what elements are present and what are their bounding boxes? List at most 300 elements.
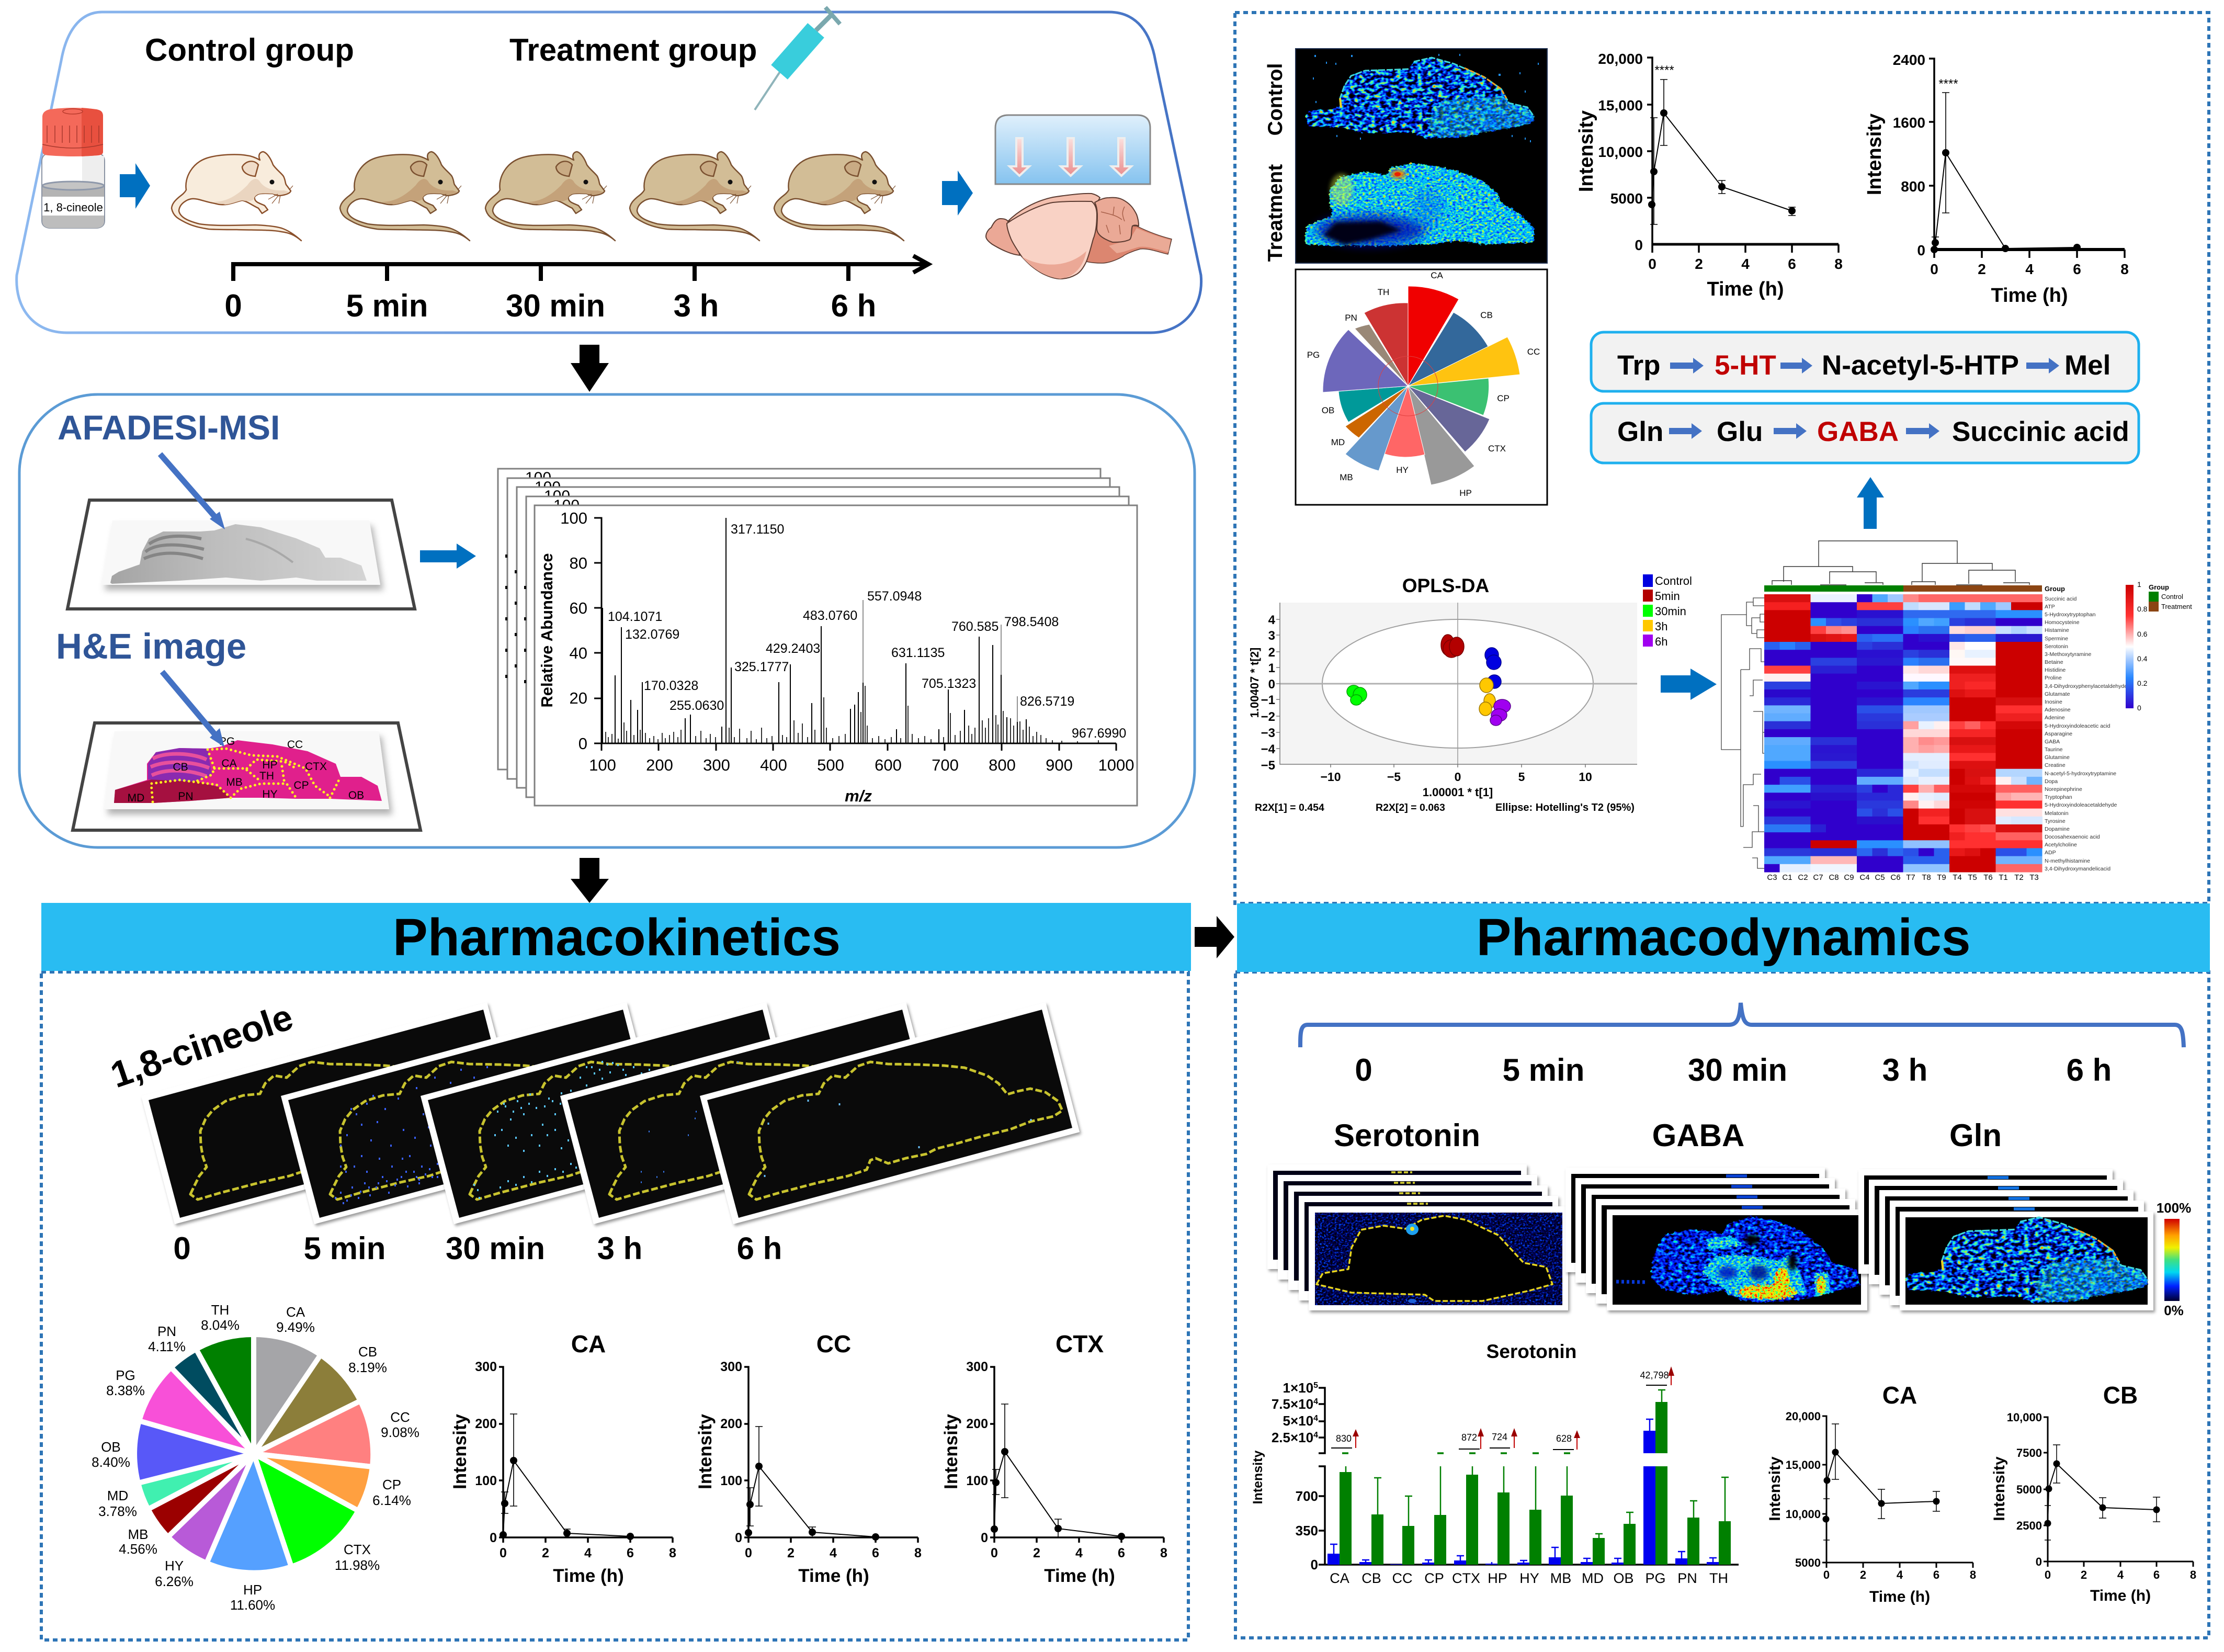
line chart: CA: CA: [1882, 1382, 1917, 1409]
heatmap row labels: Tyrosine: [2045, 818, 2066, 824]
line chart: CC: 2: [787, 1546, 795, 1560]
pathway box: glutamine pathway: Succinic acid: [1952, 416, 2129, 447]
pie chart labels: 6.26%: [155, 1574, 194, 1589]
time labels: [1355, 1053, 2112, 1088]
slide: H&E stained section: OB: [348, 789, 364, 801]
icon: syringe: [755, 7, 840, 110]
line chart: GABA-like metabolite over time: Intensity: [1864, 114, 1886, 195]
pie chart labels: CB: [358, 1344, 377, 1360]
mass spectrum peak labels: 705.1323: [922, 676, 976, 691]
heatmap column labels: C4: [1859, 873, 1870, 882]
heading: AFADESI-MSI: AFADESI-MSI: [58, 408, 280, 447]
mass spectrum x ticks: 100: [589, 756, 616, 774]
rose chart: regional change: OB: [1322, 405, 1334, 415]
line chart: CC: 0: [735, 1531, 742, 1545]
line chart: GABA-like metabolite over time: ****: [1938, 77, 1958, 91]
label: Treatment: Treatment: [1264, 164, 1287, 262]
rose chart: regional change: CB: [1480, 310, 1493, 320]
icon: control mouse: [172, 152, 301, 241]
heatmap row labels: Histamine: [2045, 627, 2069, 633]
line chart: GABA-like metabolite over time: 8: [2120, 261, 2129, 277]
pie chart labels: TH: [211, 1302, 229, 1318]
line chart: CTX: Time (h): [1044, 1566, 1115, 1586]
arrow: mice to brain: [942, 171, 973, 216]
header band: Pharmacokinetics: [41, 903, 1191, 971]
line chart: serotonin-like metabolite over time: Intensity: [1575, 110, 1597, 192]
rose chart: regional change: HY: [1396, 465, 1409, 475]
heatmap row labels: Melatonin: [2045, 810, 2069, 817]
legend: time groups: [1643, 574, 1692, 648]
stacked mass spectra: 100: [544, 488, 570, 505]
bar chart: Serotonin by region: CTX: [1452, 1570, 1480, 1586]
heatmap column labels: T6: [1983, 873, 1993, 882]
heatmap row labels: N-acetyl-5-hydroxytryptamine: [2045, 771, 2116, 777]
line chart: GABA-like metabolite over time: 2400: [1893, 52, 1925, 68]
heatmap colour bar: 0: [2137, 704, 2141, 712]
pie chart labels: 3.78%: [98, 1503, 137, 1519]
OPLS-DA statistics: R2X[2] = 0.063: [1376, 802, 1445, 813]
line chart: CB: CB: [2103, 1382, 2138, 1409]
fold-change callouts: 42,798: [1640, 1370, 1669, 1381]
image: 1,8-cineole at 5 min: [281, 1002, 661, 1224]
heatmap row labels: Taurine: [2045, 746, 2063, 753]
OPLS-DA statistics: R2X[1] = 0.454: [1255, 802, 1324, 813]
line chart: GABA-like metabolite over time: 0: [1917, 242, 1925, 258]
image: 1,8-cineole at 0 h: [141, 1002, 521, 1224]
mass spectrum peak labels: 760.585: [951, 619, 998, 634]
line chart: CC: 200: [720, 1417, 742, 1431]
heatmap group bar: [1764, 585, 2065, 593]
pie chart labels: 8.04%: [201, 1317, 240, 1333]
line chart: CTX: 300: [966, 1360, 988, 1374]
brace over time points: [1300, 1003, 2184, 1047]
mass spectrum peak labels: 132.0769: [625, 627, 679, 642]
OPLS-DA statistics: [1255, 802, 1635, 813]
mass spectrum x ticks: 800: [989, 756, 1016, 774]
slide: H&E stained section: PN: [178, 790, 194, 802]
heading: GABA: GABA: [1652, 1118, 1744, 1153]
heatmap column labels: T1: [1999, 873, 2008, 882]
heatmap column labels: T9: [1937, 873, 1946, 882]
scatter plot: OPLS-DA: −1: [1261, 693, 1275, 707]
mass spectrum x ticks: 600: [875, 756, 902, 774]
arrow: workflow to MSI: [571, 345, 609, 392]
timeline labels: [224, 288, 876, 323]
heatmap row labels: Norepinephrine: [2045, 786, 2082, 793]
line chart: CTX: 100: [966, 1474, 988, 1488]
line chart: CTX: [941, 1330, 1167, 1586]
line chart: CTX: 0: [991, 1546, 998, 1560]
heatmap group legend: [2149, 583, 2192, 612]
arrow: tissue to spectra: [420, 544, 476, 569]
scatter plot: OPLS-DA: 1.00001 * t[1]: [1423, 786, 1493, 799]
line chart: CC: 300: [720, 1360, 742, 1374]
time labels: [173, 1231, 782, 1266]
stacked mass spectra: [498, 469, 1137, 806]
line chart: CA: 5000: [1795, 1556, 1821, 1569]
panel: pharmacokinetics: [41, 903, 1191, 1640]
mass spectrum x ticks: 300: [703, 756, 730, 774]
slide: H&E stained section: CTX: [305, 761, 327, 773]
heatmap group legend: Treatment: [2161, 603, 2192, 610]
time labels: 5 min: [1503, 1053, 1584, 1088]
mass spectrum peak labels: 826.5719: [1020, 694, 1074, 709]
mass spectrum x ticks: [589, 756, 1134, 774]
bar chart: Serotonin by region: 7.5×10: [1272, 1396, 1313, 1412]
arrow: heatmap to pathways: [1857, 477, 1884, 529]
header band: Pharmacodynamics: Pharmacodynamics: [1477, 908, 1970, 967]
header band: Pharmacokinetics: Pharmacokinetics: [393, 908, 841, 967]
line chart: CB: [1991, 1382, 2196, 1604]
bar chart: Serotonin by region: Intensity: [1251, 1451, 1265, 1504]
legend: time groups: 3h: [1655, 620, 1667, 633]
line chart: CA: 6: [627, 1546, 634, 1560]
mass spectrum x ticks: 500: [817, 756, 844, 774]
heatmap row labels: 5-Hydroxyindoleacetic acid: [2045, 723, 2110, 729]
line chart: CC: 4: [830, 1546, 837, 1560]
line chart: CA: 0: [500, 1546, 507, 1560]
image stack: Serotonin: [1267, 1164, 1568, 1310]
column dendrogram: [1772, 541, 2029, 585]
line chart: CA: [1766, 1382, 1976, 1605]
heatmap colour bar: 0.2: [2137, 679, 2148, 687]
slide: H&E stained section: MB: [226, 776, 243, 788]
heatmap column labels: [1767, 873, 2039, 882]
mass spectrum x ticks: 1000: [1098, 756, 1134, 774]
mass spectrum peak labels: 631.1135: [891, 646, 945, 660]
line chart: CA: 100: [475, 1474, 497, 1488]
timeline labels: 6 h: [831, 288, 876, 323]
panel: AFADESI-MSI acquisition: [19, 394, 1195, 847]
mass spectrum peak labels: 483.0760: [803, 608, 857, 623]
mass spectrum y ticks: 40: [570, 644, 587, 662]
mass spectrum tall peaks: [603, 518, 1026, 743]
line chart: serotonin-like metabolite over time: 6: [1788, 256, 1796, 272]
rose chart: regional change: CC: [1527, 347, 1540, 357]
line chart: CA: Intensity: [1766, 1456, 1784, 1521]
bar chart: Serotonin by region: TH: [1709, 1570, 1728, 1586]
bar chart: Serotonin by region: MB: [1550, 1570, 1571, 1586]
heatmap row labels: 3,4-Dihydroxyphenylacetaldehyde: [2045, 683, 2127, 689]
line chart: CC: 6: [872, 1546, 879, 1560]
bar chart: Serotonin by region: CP: [1424, 1570, 1444, 1586]
timeline labels: 0: [224, 288, 242, 323]
mass spectrum y ticks: [560, 509, 587, 753]
line chart: GABA-like metabolite over time: 0: [1930, 261, 1938, 277]
heatmap row labels: N-methylhistamine: [2045, 858, 2090, 864]
arrow: vial to mice: [120, 163, 150, 209]
bar chart: Serotonin by region: PG: [1645, 1570, 1666, 1586]
heading: H&E image: H&E image: [56, 626, 246, 666]
slide: H&E stained section: HY: [262, 788, 278, 800]
slide: H&E stained section: [73, 723, 421, 830]
line chart: CB: 2500: [2016, 1519, 2042, 1532]
slide: H&E stained section: TH: [259, 770, 274, 782]
line chart: CTX: 4: [1075, 1546, 1083, 1560]
rose chart: regional change: HP: [1459, 488, 1472, 498]
image: 1,8-cineole at 30 min: [421, 1002, 800, 1224]
bar chart: Serotonin by region: 2.5×10: [1272, 1430, 1313, 1445]
rose chart: regional change: CA: [1431, 270, 1443, 280]
heatmap row labels: Succinic acid: [2045, 596, 2077, 602]
pathway box: glutamine pathway: GABA: [1817, 416, 1899, 447]
pie chart labels: MB: [128, 1526, 149, 1542]
line chart: serotonin-like metabolite over time: 8: [1834, 256, 1843, 272]
heatmap row labels: Glutamate: [2045, 691, 2070, 697]
bar chart: Serotonin by region: Serotonin: [1487, 1341, 1576, 1362]
scatter plot: OPLS-DA: 0: [1268, 677, 1275, 692]
pie chart: regional distribution: [134, 1334, 373, 1573]
pie chart labels: PN: [157, 1323, 176, 1339]
heatmap column labels: C1: [1782, 873, 1792, 882]
scatter plot: OPLS-DA: 10: [1579, 770, 1592, 784]
heatmap row labels: Spermine: [2045, 636, 2068, 642]
heatmap row labels: Adenosine: [2045, 707, 2071, 713]
heatmap column labels: T7: [1906, 873, 1915, 882]
OPLS-DA statistics: Ellipse: Hotelling's T2 (95%): [1495, 802, 1635, 813]
colour scale: 100%: [2157, 1200, 2191, 1216]
pie chart labels: 11.60%: [230, 1597, 275, 1613]
scatter plot: OPLS-DA: OPLS-DA: [1402, 575, 1489, 596]
line chart: CA: 8: [1970, 1568, 1976, 1581]
line chart: CC: Intensity: [695, 1414, 716, 1489]
heatmap row labels: Acetylcholine: [2045, 842, 2077, 848]
pie chart labels: 11.98%: [335, 1557, 380, 1573]
line chart: CC: 8: [914, 1546, 922, 1560]
legend: time groups: 6h: [1655, 635, 1667, 648]
panel: pharmacodynamics results: [1235, 13, 2209, 903]
pathway box: tryptophan pathway: Trp: [1617, 350, 1660, 381]
line chart: CA: 0: [490, 1531, 497, 1545]
bar chart: Serotonin by region: 0: [1311, 1557, 1318, 1572]
line chart: CB: 4: [2117, 1568, 2124, 1581]
scatter plot: OPLS-DA: −4: [1261, 742, 1276, 756]
line chart: CC: [695, 1330, 922, 1586]
rose chart: regional change: [1296, 269, 1547, 505]
time labels: 6 h: [737, 1231, 782, 1266]
MSI image: control vs treatment: [1296, 49, 1547, 263]
pie chart labels: CP: [382, 1477, 401, 1492]
mass spectrum peak labels: 798.5408: [1004, 615, 1059, 629]
line chart: CC: 0: [745, 1546, 752, 1560]
scatter plot: OPLS-DA: 4: [1268, 613, 1276, 627]
time labels: 3 h: [597, 1231, 642, 1266]
heatmap colour bar: 1: [2137, 580, 2141, 589]
heading: treatment group: Treatment group: [509, 32, 757, 67]
heading: Gln: Gln: [1949, 1118, 2002, 1153]
bar chart: Serotonin by region: 700: [1296, 1488, 1318, 1504]
scatter plot: OPLS-DA: 1: [1268, 661, 1275, 675]
icon: freezing box: [995, 115, 1150, 184]
scatter plot: OPLS-DA: −5: [1261, 759, 1275, 773]
icon: 1,8-cineole vial: 1, 8-cineole: [43, 201, 103, 214]
time labels: 5 min: [304, 1231, 385, 1266]
line chart: serotonin-like metabolite over time: 2: [1695, 256, 1703, 272]
arrow: sprayer to tissue: [160, 454, 225, 529]
bar chart: Serotonin by region: HP: [1488, 1570, 1507, 1586]
heatmap row labels: [2045, 596, 2127, 872]
arrow: sprayer to stained tissue: [162, 672, 224, 747]
line chart: serotonin-like metabolite over time: 15,000: [1598, 97, 1643, 114]
scatter plot: OPLS-DA: −2: [1261, 710, 1275, 724]
heatmap column labels: C8: [1829, 873, 1839, 882]
mass spectrum y ticks: 0: [578, 734, 587, 753]
line chart: GABA-like metabolite over time: 4: [2025, 261, 2034, 277]
line chart: CA: 300: [475, 1360, 497, 1374]
heatmap: [1764, 594, 2043, 873]
line chart: CB: 0: [2045, 1568, 2051, 1581]
line chart: CA: Intensity: [450, 1414, 470, 1489]
line chart: serotonin-like metabolite over time: [1575, 51, 1843, 300]
scatter plot: OPLS-DA: [1248, 575, 1637, 799]
line chart: GABA-like metabolite over time: 6: [2073, 261, 2081, 277]
line chart: serotonin-like metabolite over time: ****: [1654, 63, 1674, 77]
timeline labels: 3 h: [674, 288, 719, 323]
bar chart: Serotonin by region: 5: [1313, 1381, 1318, 1390]
pie chart labels: 8.38%: [106, 1383, 145, 1398]
pie chart labels: HP: [243, 1582, 262, 1598]
mass spectrum x label: m/z: [845, 787, 872, 805]
line chart: CC: Time (h): [798, 1566, 869, 1586]
arrow: pharmacokinetics to pharmacodynamics: [1195, 916, 1234, 958]
pathway box: tryptophan pathway: Mel: [2064, 350, 2110, 381]
legend: time groups: 5min: [1655, 590, 1680, 603]
time labels: 0: [1355, 1053, 1372, 1088]
icon: treated mouse 3 h: [630, 152, 759, 241]
fold-change callouts: 872: [1461, 1432, 1477, 1443]
legend: time groups: Control: [1655, 574, 1692, 587]
pie chart labels: 4.56%: [119, 1541, 157, 1557]
fold-change callouts: [1331, 1366, 1674, 1450]
scatter plot: OPLS-DA: −3: [1261, 726, 1275, 740]
stacked mass spectra: 100: [525, 469, 551, 486]
slide: H&E stained section: CB: [173, 761, 188, 773]
line chart: serotonin-like metabolite over time: 0: [1648, 256, 1656, 272]
image stack: GABA: [1565, 1168, 1867, 1310]
line chart: CA: 6: [1933, 1568, 1939, 1581]
fold-change callouts: 724: [1492, 1432, 1507, 1442]
bar chart: Serotonin by region: CB: [1361, 1570, 1381, 1586]
pie chart labels: CTX: [344, 1542, 371, 1557]
line chart: CA: Time (h): [553, 1566, 624, 1586]
line chart: CA: 2: [1860, 1568, 1866, 1581]
line chart: CTX: 8: [1160, 1546, 1167, 1560]
line chart: CTX: 0: [981, 1531, 988, 1545]
bar chart: Serotonin by region: 1×10: [1283, 1380, 1313, 1396]
scatter plot: OPLS-DA: 1.00407 * t[2]: [1248, 648, 1261, 718]
heatmap row labels: Glutamine: [2045, 754, 2070, 761]
mass spectrum peak labels: 317.1150: [731, 522, 784, 537]
pie chart labels: [92, 1302, 419, 1613]
rose chart: regional change: CP: [1497, 393, 1510, 403]
scatter plot: OPLS-DA: −5: [1387, 770, 1401, 784]
scatter plot: OPLS-DA: 5: [1518, 770, 1525, 784]
mass spectrum peak labels: 325.1777: [734, 660, 789, 674]
heatmap column labels: C3: [1767, 873, 1777, 882]
mass spectrum x ticks: 900: [1046, 756, 1073, 774]
heatmap row labels: 3-Methoxytyramine: [2045, 651, 2091, 658]
mass spectrum peak labels: 170.0328: [644, 678, 698, 693]
stacked mass spectra: 100: [553, 497, 580, 514]
line chart: CA: [450, 1330, 676, 1586]
pathway box: tryptophan pathway: [1591, 332, 2139, 391]
mass spectrum axes: [594, 518, 1116, 751]
icon: treated mouse 30 min: [485, 152, 615, 241]
pie chart labels: 9.49%: [276, 1319, 315, 1335]
heatmap row labels: Inosine: [2045, 699, 2062, 705]
label: 1,8-cineole: 1,8-cineole: [106, 996, 298, 1095]
bar chart: Serotonin by region: CC: [1392, 1570, 1412, 1586]
bar chart: Serotonin by region: OB: [1613, 1570, 1634, 1586]
bar chart: Serotonin by region: CA: [1330, 1570, 1349, 1586]
rose chart: regional change: MD: [1331, 437, 1345, 447]
heatmap row labels: Dopamine: [2045, 826, 2070, 832]
heatmap colour bar: 0.8: [2137, 605, 2148, 613]
heatmap row labels: Betaine: [2045, 659, 2063, 665]
line chart: CC: 100: [720, 1474, 742, 1488]
line chart: CA: 4: [1897, 1568, 1903, 1581]
heatmap row labels: Homocysteine: [2045, 619, 2080, 626]
slide: H&E stained section: MD: [128, 792, 144, 804]
mass spectrum peak labels: [608, 522, 1126, 741]
mass spectrum x ticks: 400: [760, 756, 787, 774]
pathway box: glutamine pathway: [1591, 403, 2139, 463]
timeline labels: 5 min: [346, 288, 428, 323]
line chart: CA: 4: [584, 1546, 592, 1560]
mass spectrum y label: Relative Abundance: [538, 553, 556, 708]
heatmap row labels: Proline: [2045, 675, 2062, 681]
slide: unstained tissue section: [67, 500, 415, 609]
line chart: serotonin-like metabolite over time: 10,000: [1598, 144, 1643, 160]
heatmap row labels: Histidine: [2045, 667, 2066, 673]
pathway box: glutamine pathway: Gln: [1617, 416, 1663, 447]
arrow: OPLS-DA to heatmap: [1661, 669, 1717, 700]
image stack: Gln: [1858, 1169, 2153, 1310]
heatmap column labels: T3: [2029, 873, 2039, 882]
mass spectrum y ticks: 60: [570, 599, 587, 617]
heatmap row labels: Dopa: [2045, 778, 2058, 785]
line chart: CB: 0: [2036, 1555, 2042, 1568]
mass spectrum peak labels: 104.1071: [608, 609, 662, 624]
heatmap column labels: T5: [1968, 873, 1977, 882]
slide: H&E stained section: PG: [219, 736, 235, 748]
line chart: CA: Time (h): [1869, 1588, 1930, 1605]
line chart: CA: 15,000: [1786, 1458, 1821, 1472]
heatmap row labels: ADP: [2045, 850, 2056, 856]
heatmap column labels: C6: [1890, 873, 1901, 882]
bar chart: Serotonin by region: MD: [1582, 1570, 1604, 1586]
line chart: CB: Time (h): [2090, 1587, 2151, 1604]
heading: Serotonin: Serotonin: [1334, 1118, 1480, 1153]
heatmap group legend: Group: [2149, 583, 2169, 591]
heatmap row labels: ATP: [2045, 604, 2055, 610]
heatmap row labels: Creatine: [2045, 762, 2066, 768]
line chart: CA: 2: [542, 1546, 549, 1560]
icon: treated mouse 6 h: [774, 152, 904, 241]
line chart: GABA-like metabolite over time: Time (h): [1991, 285, 2068, 307]
line chart: serotonin-like metabolite over time: 4: [1741, 256, 1750, 272]
pie chart labels: PG: [116, 1367, 135, 1383]
mass spectrum x ticks: 200: [646, 756, 673, 774]
slide: H&E stained section: CP: [293, 779, 309, 791]
line chart: GABA-like metabolite over time: 800: [1901, 178, 1925, 195]
bar chart: Serotonin by region: 5×10: [1283, 1413, 1313, 1429]
time labels: 0: [173, 1231, 191, 1266]
image: 1,8-cineole at 6 h: [700, 1002, 1080, 1224]
colour scale: 0%: [2164, 1303, 2184, 1318]
image: 1,8-cineole at 3 h: [560, 1002, 940, 1224]
bar chart: Serotonin by region: PN: [1677, 1570, 1697, 1586]
